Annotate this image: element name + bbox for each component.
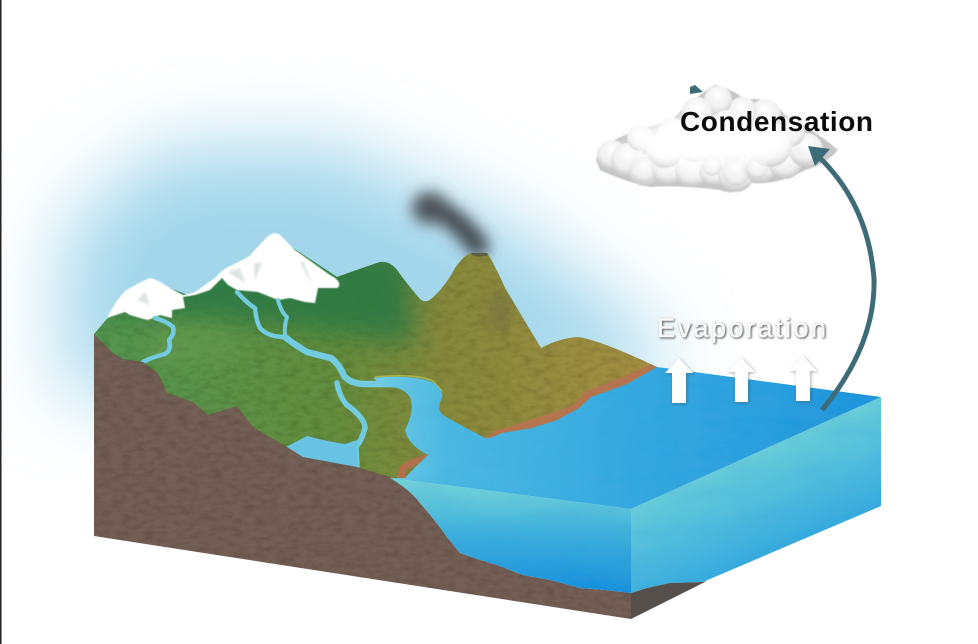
ocean front face <box>390 478 631 593</box>
snow caps <box>107 233 339 320</box>
arrow 3 <box>789 356 817 401</box>
condensation cloud <box>596 85 838 192</box>
cloud silhouette <box>596 85 838 192</box>
ocean right face <box>631 397 881 593</box>
crater <box>471 253 488 256</box>
soil block right side <box>631 581 707 619</box>
cloud highlight <box>630 116 794 168</box>
condensation curved arrow <box>808 146 874 410</box>
ocean top surface and river estuary <box>373 367 881 509</box>
tip of hidden arrow behind cloud <box>690 85 703 94</box>
dark green upper slopes <box>80 245 412 345</box>
evaporation label: Evaporation <box>657 313 826 343</box>
soil block front <box>94 334 631 619</box>
volcano shading <box>488 290 512 328</box>
frame edge <box>0 0 2 644</box>
arrow 2 <box>727 357 755 402</box>
volcano smoke <box>412 192 478 246</box>
evaporation arrows <box>665 356 817 403</box>
cloud puffs <box>597 86 823 192</box>
light slope highlight <box>154 324 236 362</box>
rivers <box>143 292 442 468</box>
orange shoreline: river delta <box>397 454 429 478</box>
condensation label: Condensation <box>680 106 873 137</box>
lake <box>286 436 358 468</box>
river bank <box>375 376 442 391</box>
arrow 1 <box>665 358 693 403</box>
sky glow <box>65 145 660 395</box>
orange shoreline: main coast <box>485 365 657 438</box>
arrowhead <box>808 146 830 166</box>
snow shading <box>137 262 312 305</box>
land: mountains <box>94 246 657 480</box>
front puffs <box>631 156 768 186</box>
